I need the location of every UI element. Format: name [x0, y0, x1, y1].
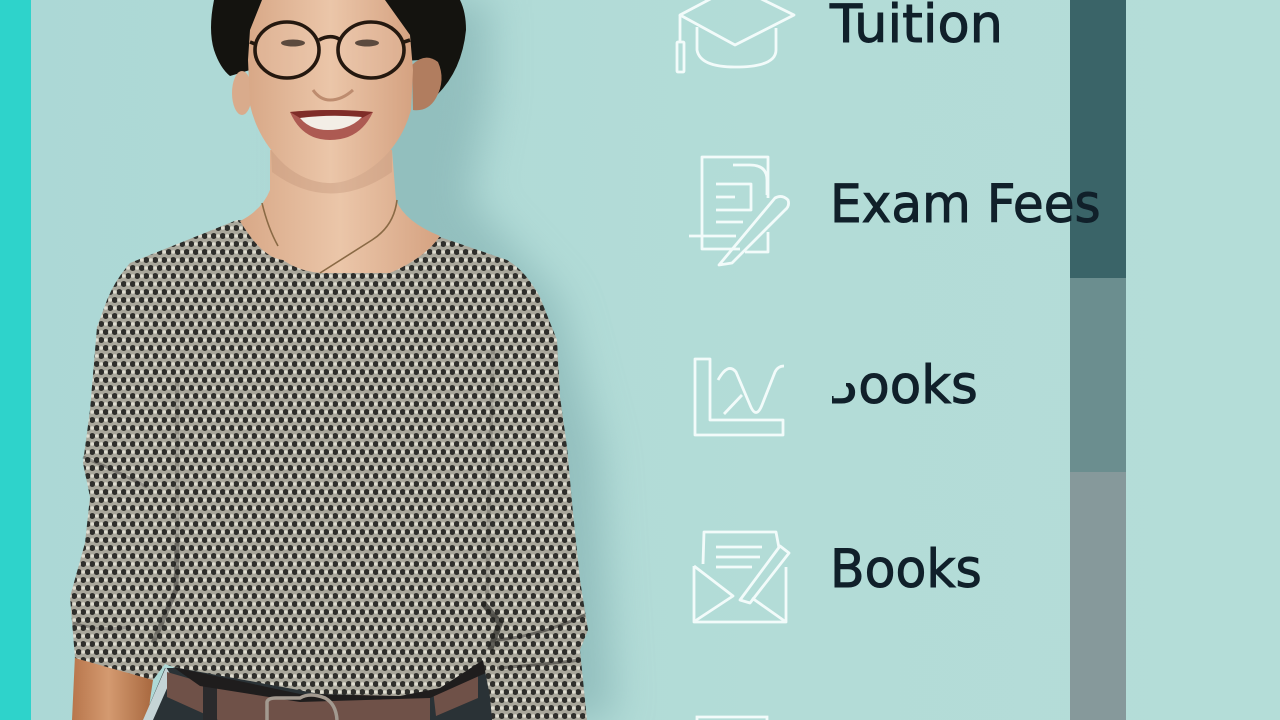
label: exam fees: Exam Fees	[830, 174, 1101, 235]
right ear	[412, 58, 442, 110]
label: books: Books	[830, 539, 982, 600]
left forearm	[72, 655, 153, 720]
left accent stripe	[0, 0, 31, 720]
icon: envelope with letter and pencil	[694, 532, 789, 622]
icon: graduation cap	[677, 0, 794, 72]
person drop shadow	[300, 0, 615, 720]
mouth	[290, 110, 373, 140]
eyes	[281, 40, 379, 46]
belt	[167, 660, 488, 720]
label: books with partly hidden first letter: Books	[823, 355, 978, 416]
hair	[211, 0, 466, 95]
face	[248, 0, 413, 183]
trousers	[143, 668, 497, 720]
person photo illustration	[70, 0, 588, 720]
chin shadow	[271, 150, 392, 194]
glasses	[250, 22, 410, 78]
icon: chart on axes	[695, 359, 784, 435]
sweater fold shadows	[73, 347, 585, 668]
stacked vertical bar	[1070, 0, 1126, 720]
necklace	[262, 200, 397, 273]
icon: exam paper and pencil	[689, 157, 789, 265]
shirt tail strip	[143, 667, 172, 720]
neck and chest	[240, 150, 440, 273]
left ear	[232, 71, 252, 115]
nose	[313, 90, 353, 100]
sweater	[70, 220, 588, 720]
icon: partially visible item	[697, 717, 767, 720]
